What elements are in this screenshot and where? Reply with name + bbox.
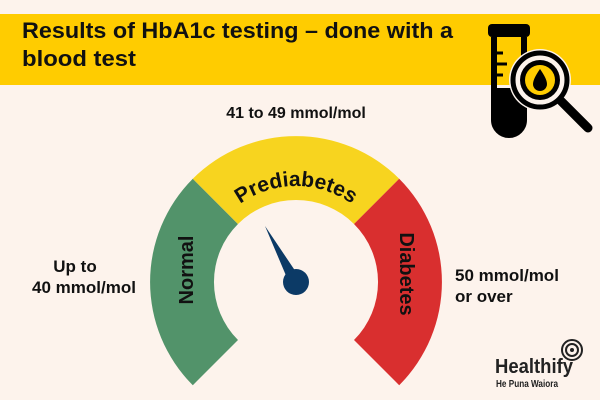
gauge	[150, 136, 442, 386]
segment: normal	[150, 179, 238, 385]
needle	[265, 226, 309, 295]
label: diabetes: Diabetes	[395, 232, 417, 316]
title: Results of HbA1c testing – done with a	[22, 18, 454, 43]
logo: Healthify: Healthify	[495, 356, 574, 378]
segment: diabetes	[354, 179, 442, 385]
title: blood test	[22, 46, 137, 71]
range label: normal: Up to	[53, 257, 97, 276]
logo: Healthify: He Puna Waiora	[496, 379, 558, 390]
title	[22, 18, 454, 71]
range label: diabetes: 50 mmol/mol	[455, 266, 559, 285]
range label: normal: 40 mmol/mol	[32, 278, 136, 297]
range label: normal	[32, 257, 136, 297]
range label: prediabetes: 41 to 49 mmol/mol	[226, 105, 366, 122]
label: normal: Normal	[176, 236, 198, 304]
icon: test tube with magnifier	[488, 24, 588, 135]
segment: prediabetes	[193, 136, 399, 224]
range label: diabetes: or over	[455, 287, 513, 306]
logo: Healthify	[495, 340, 582, 390]
range label: diabetes	[455, 266, 559, 306]
header band	[0, 14, 600, 85]
label: prediabetes: Prediabetes	[234, 170, 356, 203]
